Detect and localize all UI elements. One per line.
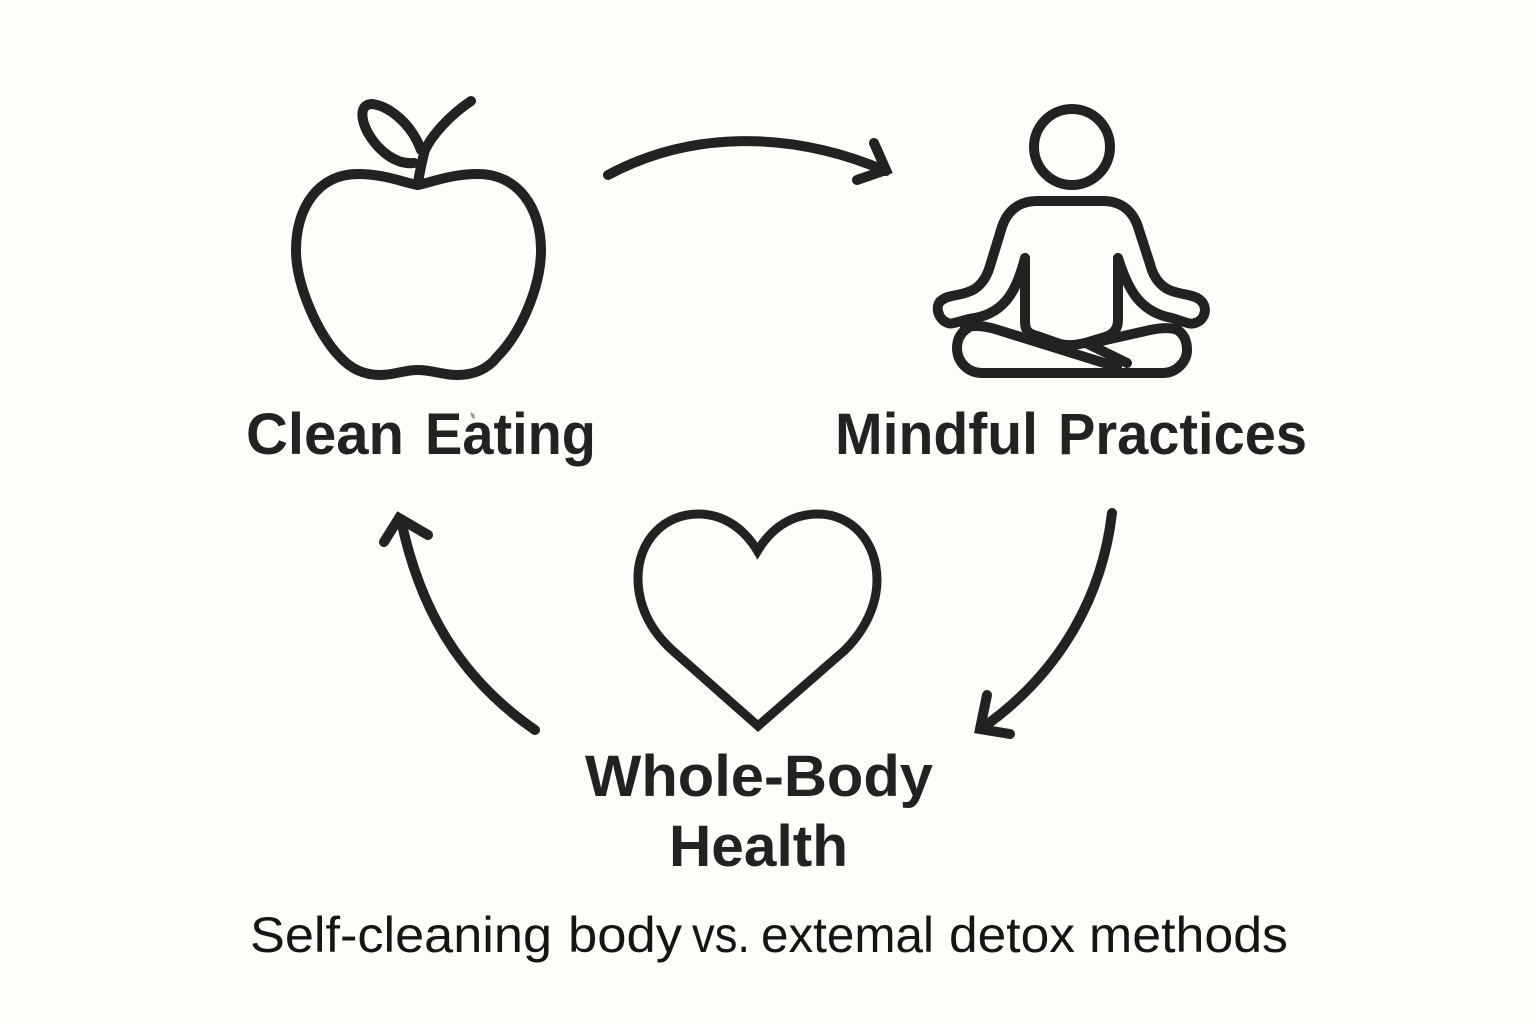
arrow: whole-body health to clean eating <box>384 518 535 730</box>
caption: detox <box>949 907 1075 963</box>
label: mindful practices: Practices <box>1058 402 1307 467</box>
label: mindful practices: Mindful <box>835 402 1038 467</box>
caption: body <box>568 907 682 963</box>
label: clean eating: Eating <box>425 402 596 467</box>
icon: apple <box>296 101 541 375</box>
caption: Self-cleaning <box>250 907 552 963</box>
caption <box>250 907 1288 963</box>
label: whole-body health <box>585 744 933 879</box>
label: whole-body health: Whole-Body <box>585 744 933 809</box>
label: clean eating <box>246 402 596 467</box>
caption: vs. <box>692 907 750 963</box>
caption: methods <box>1089 907 1288 963</box>
arrow: clean eating to mindful practices <box>608 141 886 180</box>
icon: meditating person <box>938 109 1205 373</box>
caption: extemal <box>761 907 934 963</box>
label: whole-body health: Health <box>669 814 848 879</box>
label: mindful practices <box>835 402 1307 467</box>
label: clean eating: Clean <box>246 402 404 467</box>
arrow: mindful practices to whole-body health <box>980 513 1112 734</box>
icon: heart <box>638 514 877 726</box>
